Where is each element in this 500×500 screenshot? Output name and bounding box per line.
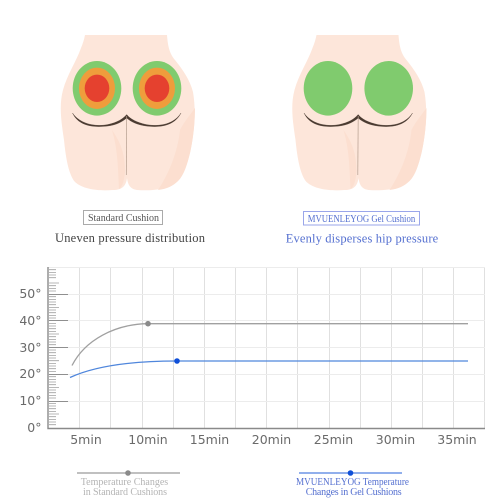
left hip even pressure	[304, 61, 352, 116]
legend: gel cushions: MVUENLEYOG Temperature	[296, 477, 410, 488]
y axis labels	[19, 286, 42, 435]
label: gel cushion: MVUENLEYOG Gel Cushion	[308, 214, 415, 225]
y axis labels: 10°	[19, 393, 42, 408]
left hip pressure zones	[73, 61, 121, 116]
x axis labels: 30min	[376, 432, 415, 447]
line chart: temperature over time	[19, 267, 485, 447]
right hip even pressure	[364, 61, 413, 116]
x axis labels: 5min	[70, 432, 102, 447]
y axis labels: 0°	[27, 420, 42, 435]
legend: gel cushions	[296, 470, 410, 498]
x axis labels: 15min	[190, 432, 229, 447]
series: standard cushion temperature	[72, 321, 468, 366]
legend: standard cushions: in Standard Cushions	[83, 487, 167, 498]
caption: even pressure: Evenly disperses hip pressure	[286, 232, 439, 246]
y axis labels: 40°	[19, 313, 42, 328]
x axis labels: 20min	[252, 432, 291, 447]
legend: standard cushions	[77, 470, 180, 498]
illustration: gel cushion pressure map	[292, 35, 426, 190]
x axis labels: 10min	[128, 432, 168, 447]
illustration: standard cushion pressure map	[61, 35, 195, 190]
x axis labels	[70, 432, 477, 447]
caption: uneven pressure: Uneven pressure distribution	[55, 231, 206, 245]
y axis labels: 20°	[19, 366, 42, 381]
legend: standard cushions: Temperature Changes	[81, 477, 168, 488]
series: gel cushion temperature	[70, 358, 468, 378]
y axis labels: 50°	[19, 286, 42, 301]
label: standard cushion: Standard Cushion	[88, 213, 159, 224]
x axis labels: 25min	[314, 432, 353, 447]
x axis labels: 35min	[437, 432, 477, 447]
y axis labels: 30°	[19, 340, 42, 355]
right hip pressure zones	[133, 61, 181, 116]
axes	[48, 267, 485, 428]
legend: gel cushions: Changes in Gel Cushions	[306, 487, 402, 498]
y axis ruler ticks	[49, 270, 68, 425]
